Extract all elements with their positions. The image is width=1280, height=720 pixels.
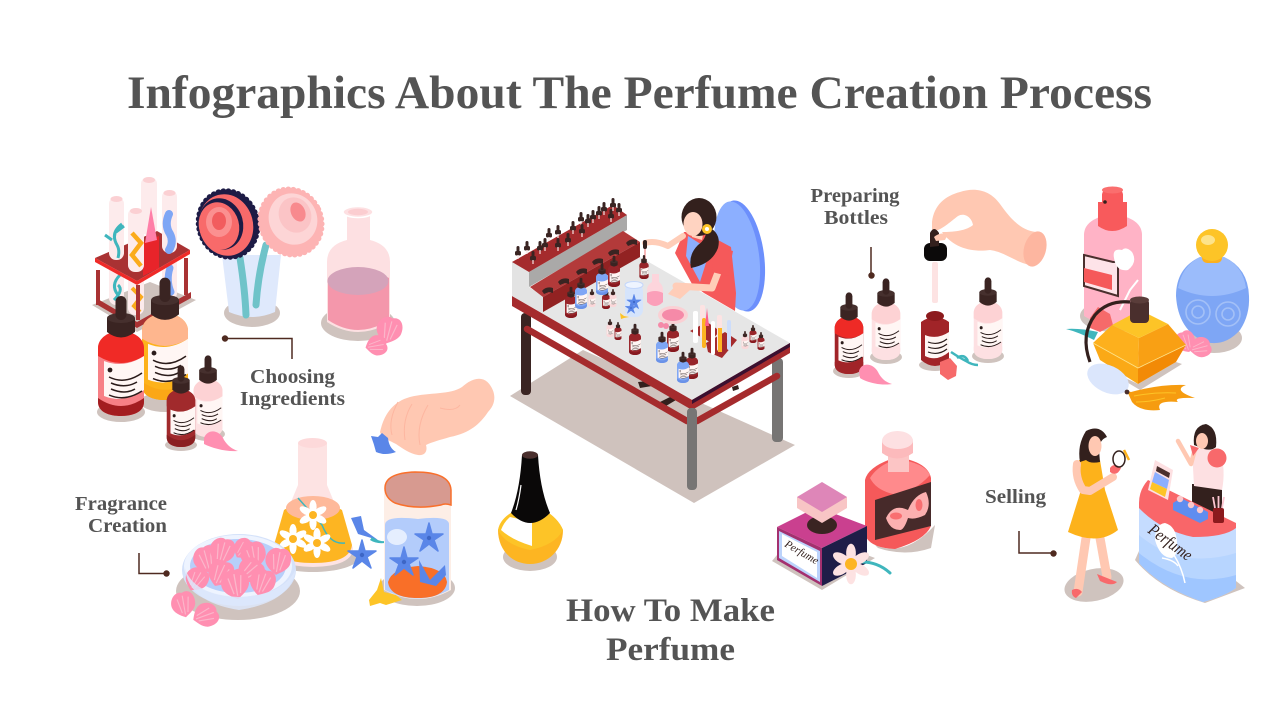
bottle: pink spray: [1080, 186, 1146, 332]
counter with perfume display: [1135, 460, 1245, 603]
back leg: [521, 313, 531, 395]
heading: how to make perfume: How To Make: [566, 593, 775, 629]
bottle: pale right: [972, 277, 1004, 363]
bottle: open dark red: [919, 311, 951, 371]
glass with flowers: [625, 282, 643, 317]
mini test tube racks: [690, 305, 737, 358]
tiny yellow flowers: [620, 313, 629, 319]
table top: [512, 257, 790, 410]
panel: preparing bottles: [810, 185, 1050, 385]
connector dot: [1050, 550, 1057, 557]
connector: [1019, 531, 1053, 553]
icon: flowers outside the flask: [348, 516, 385, 568]
petals: [1172, 328, 1213, 360]
bottle: black and yellow: [498, 451, 563, 571]
floor shadow: [510, 350, 795, 503]
stepped bottle shelf: [512, 198, 640, 313]
box: square perfume bottle: [772, 482, 875, 590]
icon: petal: [204, 431, 238, 451]
blue bottles on table: [575, 264, 689, 383]
bottle: red: [97, 296, 145, 422]
pale bottles on table: [589, 289, 748, 349]
title: Infographics About The Perfume Creation Process: [127, 67, 1152, 119]
bottle: orange: [140, 278, 190, 412]
figure: perfumer: [645, 198, 736, 311]
right leg: [772, 358, 783, 442]
dropper in hand: [644, 247, 646, 270]
label: fragrance creation: Fragrance: [75, 493, 167, 515]
connector dot: [222, 335, 228, 342]
panel: fragrance creation: [75, 379, 563, 631]
panel: central workbench: [510, 197, 795, 503]
label: preparing bottles: Preparing: [810, 185, 900, 207]
connector: [225, 338, 292, 359]
icon: conical flask with daisies: [268, 438, 358, 572]
bottle: pale left: [870, 278, 902, 364]
connector dot: [163, 570, 170, 577]
connector: [139, 553, 166, 574]
panel: selling: [772, 424, 1245, 607]
bottle: small pale: [191, 355, 225, 441]
figure: sales clerk: [1178, 424, 1226, 512]
connector dot: [868, 272, 875, 279]
label: choosing ingredients: Choosing: [250, 366, 335, 388]
icon: blue chair: [708, 197, 772, 315]
icon: roses in glass: [191, 179, 332, 327]
icon: petal: [859, 365, 892, 385]
bottle: coral with bow: [865, 431, 935, 552]
label: preparing bottles: Bottles: [824, 207, 888, 229]
counter with perfume display: Perfume: [1144, 519, 1197, 565]
icon: hand with dropper: [924, 190, 1050, 303]
label: fragrance creation: Creation: [88, 515, 167, 537]
icon: petal bowl: [169, 534, 300, 631]
connector: [870, 247, 872, 275]
icon: hand dropping flower: [371, 379, 494, 455]
petal bowl: [658, 306, 688, 329]
panel: choosing ingredients: [92, 177, 405, 451]
figure: customer in yellow dress: [1061, 429, 1129, 607]
label: choosing ingredients: Ingredients: [240, 388, 345, 410]
heading: how to make perfume: Perfume: [606, 632, 735, 668]
crossbars: [527, 329, 777, 421]
front leg: [687, 408, 697, 490]
label: selling: Selling: [985, 486, 1046, 508]
perfumer's shoes under table: [638, 381, 739, 406]
rosebud: [1090, 307, 1113, 332]
bottle: blue round: [1176, 229, 1249, 353]
panel: finished perfume bottles: [1066, 186, 1249, 410]
small pink flask: [647, 274, 663, 306]
dropper bulb: [643, 240, 647, 249]
box: square perfume bottle: Perfume: [782, 538, 821, 567]
test tube rack: [92, 177, 196, 332]
bottle: small dark red: [165, 365, 197, 451]
icon: red rosebud with leaf: [940, 352, 978, 380]
icon: pink flask: [321, 206, 405, 357]
icon: daisy with stem: [831, 544, 890, 584]
bottle: gold atomizer: [1082, 296, 1195, 410]
leaf: [1066, 329, 1098, 340]
dark bottles on table: [565, 255, 764, 379]
icon: beaker with flowers: [369, 472, 455, 606]
bottle: red: [833, 292, 865, 378]
